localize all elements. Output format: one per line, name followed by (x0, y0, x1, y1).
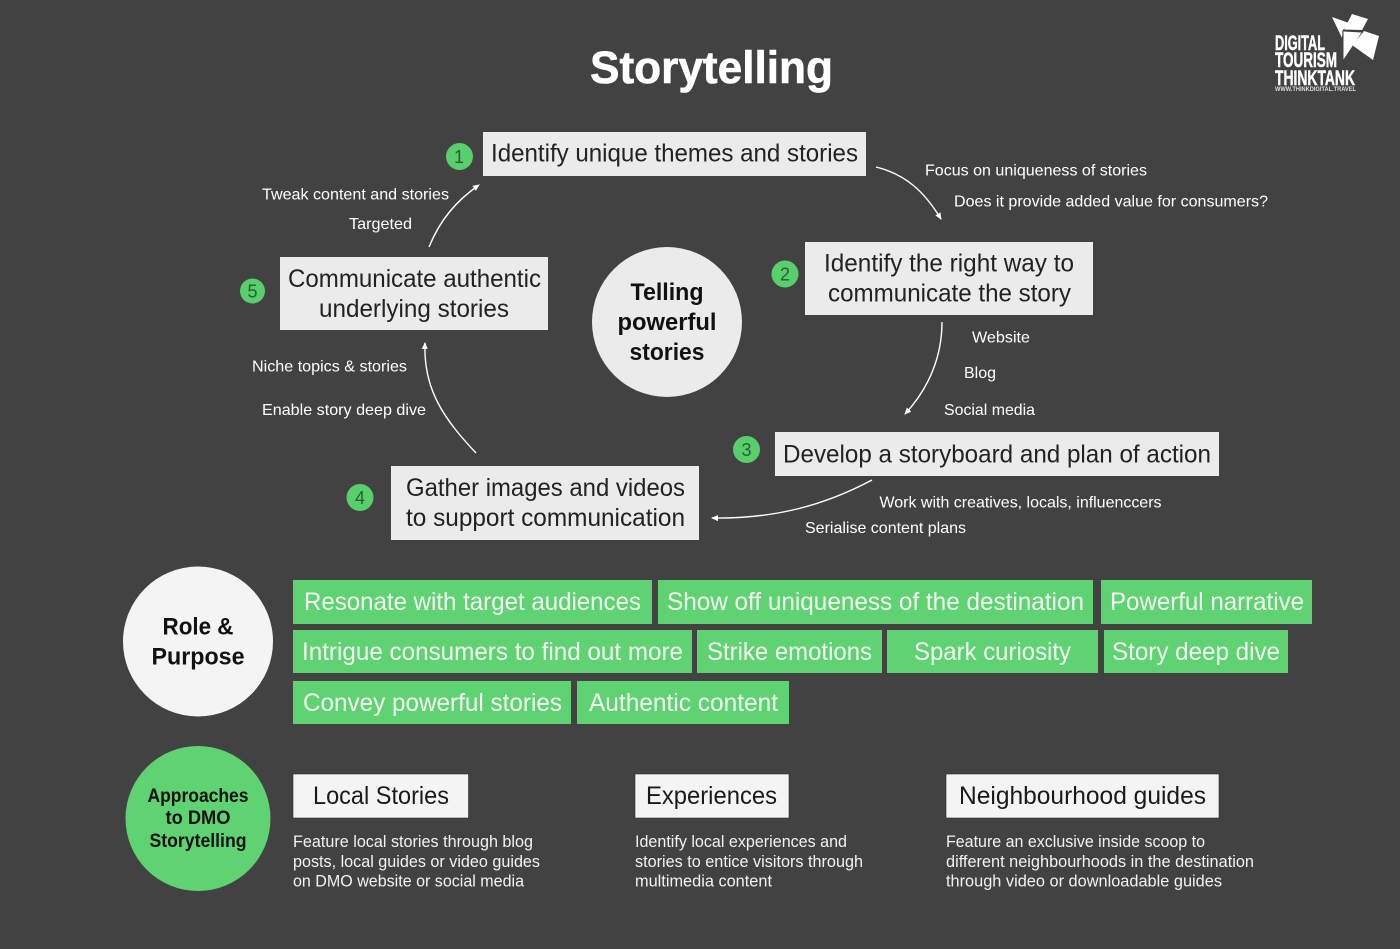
text block: posts, local guides or video guides (293, 853, 540, 871)
arrow: step 3 to step 4 (712, 480, 872, 518)
tag: Show off uniqueness of the destination (667, 588, 1084, 616)
arrow: step 4 to step 5 (425, 343, 476, 453)
tag (697, 630, 882, 673)
logo: Digital Tourism Think Tank: TOURISM (1275, 49, 1337, 72)
icon: number 3: 3 (741, 440, 752, 460)
center circle: telling powerful stories: powerful (618, 309, 716, 336)
panel: experiences (635, 774, 863, 890)
panel: step 4: to support communication (406, 504, 685, 532)
circle: approaches to DMO storytelling: Approaches (148, 786, 248, 807)
text block (293, 833, 540, 890)
icon: number 4: 4 (355, 488, 365, 508)
title: Storytelling (590, 42, 833, 93)
panel: local stories (293, 774, 540, 890)
notes: step 3 (805, 494, 1162, 537)
icon: number 2 (772, 260, 798, 288)
notes: step 2: Website (972, 330, 1030, 346)
text block: Identify local experiences and (635, 833, 847, 851)
heading (293, 774, 468, 818)
panel: step 4: Gather images and videos (406, 474, 685, 502)
arrow: step 1 to step 2 (876, 167, 941, 219)
notes: step 4: Enable story deep dive (262, 402, 426, 419)
tag: Spark curiosity (914, 638, 1071, 666)
text block (635, 833, 863, 890)
tag (658, 580, 1093, 624)
notes: step 5: Targeted (349, 216, 412, 233)
tag (293, 630, 692, 673)
notes: step 2 (944, 330, 1035, 419)
icon: folded paper (1332, 14, 1379, 60)
panel: step 3 (733, 432, 1219, 476)
notes: step 4: Niche topics & stories (252, 358, 407, 376)
center circle: telling powerful stories (592, 247, 742, 397)
tag (293, 580, 652, 624)
tag: Convey powerful stories (303, 689, 562, 717)
logo: Digital Tourism Think Tank: WWW.THINKDIGITAL.TRAVEL (1275, 86, 1356, 93)
panel: step 2: Identify the right way to (824, 250, 1074, 278)
icon: number 3 (733, 436, 760, 463)
logo: Digital Tourism Think Tank: THINKTANK (1275, 67, 1355, 90)
icon: number 5 (240, 278, 265, 304)
panel: role and purpose tags (293, 580, 1312, 724)
circle: approaches to DMO storytelling: Storytelling (150, 831, 246, 852)
notes: step 4 (252, 358, 426, 419)
tag: Resonate with target audiences (304, 588, 641, 616)
notes: step 2: Blog (964, 365, 996, 382)
text block: different neighbourhoods in the destination (946, 853, 1254, 871)
text block: stories to entice visitors through (635, 853, 863, 871)
panel: neighbourhood guides (946, 774, 1254, 890)
heading: Experiences (646, 782, 777, 810)
logo: Digital Tourism Think Tank (1275, 14, 1379, 93)
tag (887, 630, 1098, 673)
tag: Story deep dive (1112, 638, 1280, 666)
notes: step 1: Does it provide added value for consumers? (954, 194, 1268, 210)
heading: Local Stories (313, 782, 449, 810)
notes: step 3: Work with creatives, locals, influenccers (880, 494, 1162, 512)
panel: step 3: Develop a storyboard and plan of action (783, 440, 1211, 468)
tag: Powerful narrative (1110, 588, 1304, 616)
panel: step 1: Identify unique themes and stories (491, 140, 858, 168)
text block: Feature local stories through blog (293, 833, 533, 851)
panel: step 5 (240, 257, 548, 330)
panel: step 5: underlying stories (319, 295, 509, 323)
arrow: step 5 to step 1 (429, 185, 479, 247)
text block: through video or downloadable guides (946, 872, 1222, 890)
icon: number 1 (446, 143, 473, 170)
notes: step 1 (925, 162, 1268, 210)
icon: number 2: 2 (780, 264, 790, 284)
circle: approaches to DMO storytelling: to DMO (166, 808, 230, 829)
notes: step 5 (262, 186, 449, 233)
panel: step 5: Communicate authentic (288, 265, 541, 293)
tag (293, 681, 571, 724)
circle: role and purpose: Role & (162, 614, 234, 640)
heading: Neighbourhood guides (959, 782, 1206, 810)
text block (946, 833, 1254, 890)
tag: Strike emotions (707, 638, 872, 666)
text block: on DMO website or social media (293, 872, 525, 890)
icon: number 1: 1 (454, 147, 464, 167)
text block: Feature an exclusive inside scoop to (946, 833, 1205, 851)
tag (577, 681, 789, 724)
panel: step 1 (446, 132, 866, 176)
heading (946, 774, 1219, 818)
notes: step 5: Tweak content and stories (262, 186, 449, 204)
heading (635, 774, 789, 818)
circle: role and purpose (123, 566, 273, 716)
tag: Intrigue consumers to find out more (302, 638, 683, 666)
logo: Digital Tourism Think Tank: DIGITAL (1275, 32, 1325, 55)
circle: approaches to DMO storytelling (126, 746, 270, 891)
arrow: step 2 to step 3 (905, 322, 942, 414)
circle: role and purpose: Purpose (152, 644, 244, 670)
tag (1104, 630, 1288, 673)
notes: step 2: Social media (944, 402, 1035, 419)
notes: step 1: Focus on uniqueness of stories (925, 162, 1147, 180)
center circle: telling powerful stories: stories (630, 339, 704, 366)
center circle: telling powerful stories: Telling (630, 279, 704, 306)
panel: step 4 (346, 466, 699, 540)
tag (1101, 580, 1312, 624)
icon: number 5: 5 (247, 282, 258, 302)
panel: step 2 (772, 242, 1093, 315)
icon: number 4 (346, 484, 374, 511)
text block: multimedia content (635, 872, 772, 890)
panel: step 2: communicate the story (828, 280, 1071, 308)
tag: Authentic content (589, 689, 778, 717)
notes: step 3: Serialise content plans (805, 520, 966, 537)
